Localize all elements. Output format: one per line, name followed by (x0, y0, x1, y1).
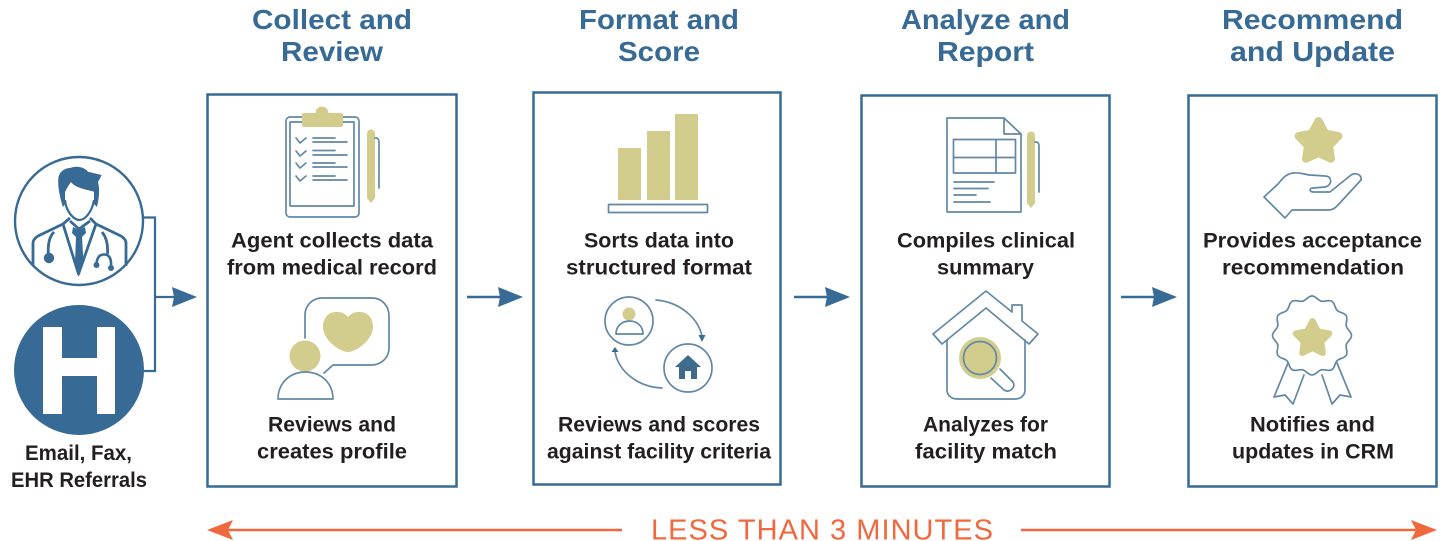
icon: doctor (15, 157, 143, 285)
panel: collect and review (208, 4, 456, 486)
timeline: less than 3 minutes (207, 514, 1437, 541)
icon: clipboard (286, 106, 379, 217)
heading: and Update (1230, 36, 1395, 67)
heading (901, 4, 1070, 67)
text: clinical summary: summary (937, 256, 1034, 280)
text: creates profile (257, 414, 407, 464)
text: collects data: from medical record (227, 256, 437, 280)
text: sorts data: Sorts data into (584, 230, 734, 252)
arrow: sources into collect step (144, 218, 197, 371)
heading (252, 4, 412, 67)
heading (1222, 4, 1403, 67)
text: updates CRM: Notifies and (1250, 414, 1375, 436)
text: clinical summary (897, 230, 1075, 280)
icon: document (947, 118, 1039, 212)
icon: house with magnifier (933, 291, 1038, 399)
box (1188, 96, 1436, 486)
box (534, 92, 780, 484)
text: updates CRM (1232, 414, 1394, 464)
panel: referral sources: EHR Referrals (11, 469, 147, 492)
text: recommendation (1203, 230, 1422, 280)
icon: star over hand (1264, 121, 1361, 218)
text: facility match: Analyzes for (923, 414, 1048, 436)
text: updates CRM: updates in CRM (1232, 440, 1394, 464)
heading: Collect and (252, 4, 412, 35)
icon: award rosette (1272, 296, 1352, 404)
arrow: analyze to recommend (1121, 287, 1177, 307)
icon: hospital (14, 305, 144, 435)
arrow: format to analyze (794, 287, 850, 307)
panel: analyze and report (862, 4, 1110, 486)
text: sorts data: structured format (566, 256, 752, 280)
text: clinical summary: Compiles clinical (897, 230, 1075, 252)
text: scores against criteria: Reviews and scores (558, 414, 760, 436)
text: collects data: Agent collects data (231, 230, 433, 252)
box (208, 94, 456, 486)
text: recommendation: Provides acceptance (1203, 230, 1422, 252)
text: collects data (227, 230, 437, 280)
panel: referral sources (11, 157, 147, 492)
panel: recommend and update (1188, 4, 1436, 486)
icon: bar chart (608, 114, 708, 212)
text: facility match (915, 414, 1057, 464)
heading: Analyze and (901, 4, 1070, 35)
heading: Format and (579, 4, 739, 35)
box (862, 96, 1110, 486)
text: scores against criteria: against facility criteria (547, 440, 771, 464)
arrow: collect to format (467, 287, 523, 307)
text: scores against criteria (547, 414, 771, 464)
text: recommendation: recommendation (1222, 256, 1404, 280)
text: creates profile: creates profile (257, 440, 407, 464)
heading: Recommend (1222, 4, 1403, 35)
heading: Review (281, 36, 383, 67)
panel: format and score (534, 4, 780, 484)
heading: Score (618, 36, 700, 67)
icon: profile with heart bubble (278, 298, 389, 399)
heading: Report (937, 36, 1034, 67)
icon: scoring cycle (605, 297, 712, 392)
text: creates profile: Reviews and (268, 414, 396, 436)
text: facility match: facility match (915, 440, 1057, 464)
label: referral sources: Email, Fax, (25, 442, 132, 465)
heading (579, 4, 739, 67)
text: sorts data (566, 230, 752, 280)
